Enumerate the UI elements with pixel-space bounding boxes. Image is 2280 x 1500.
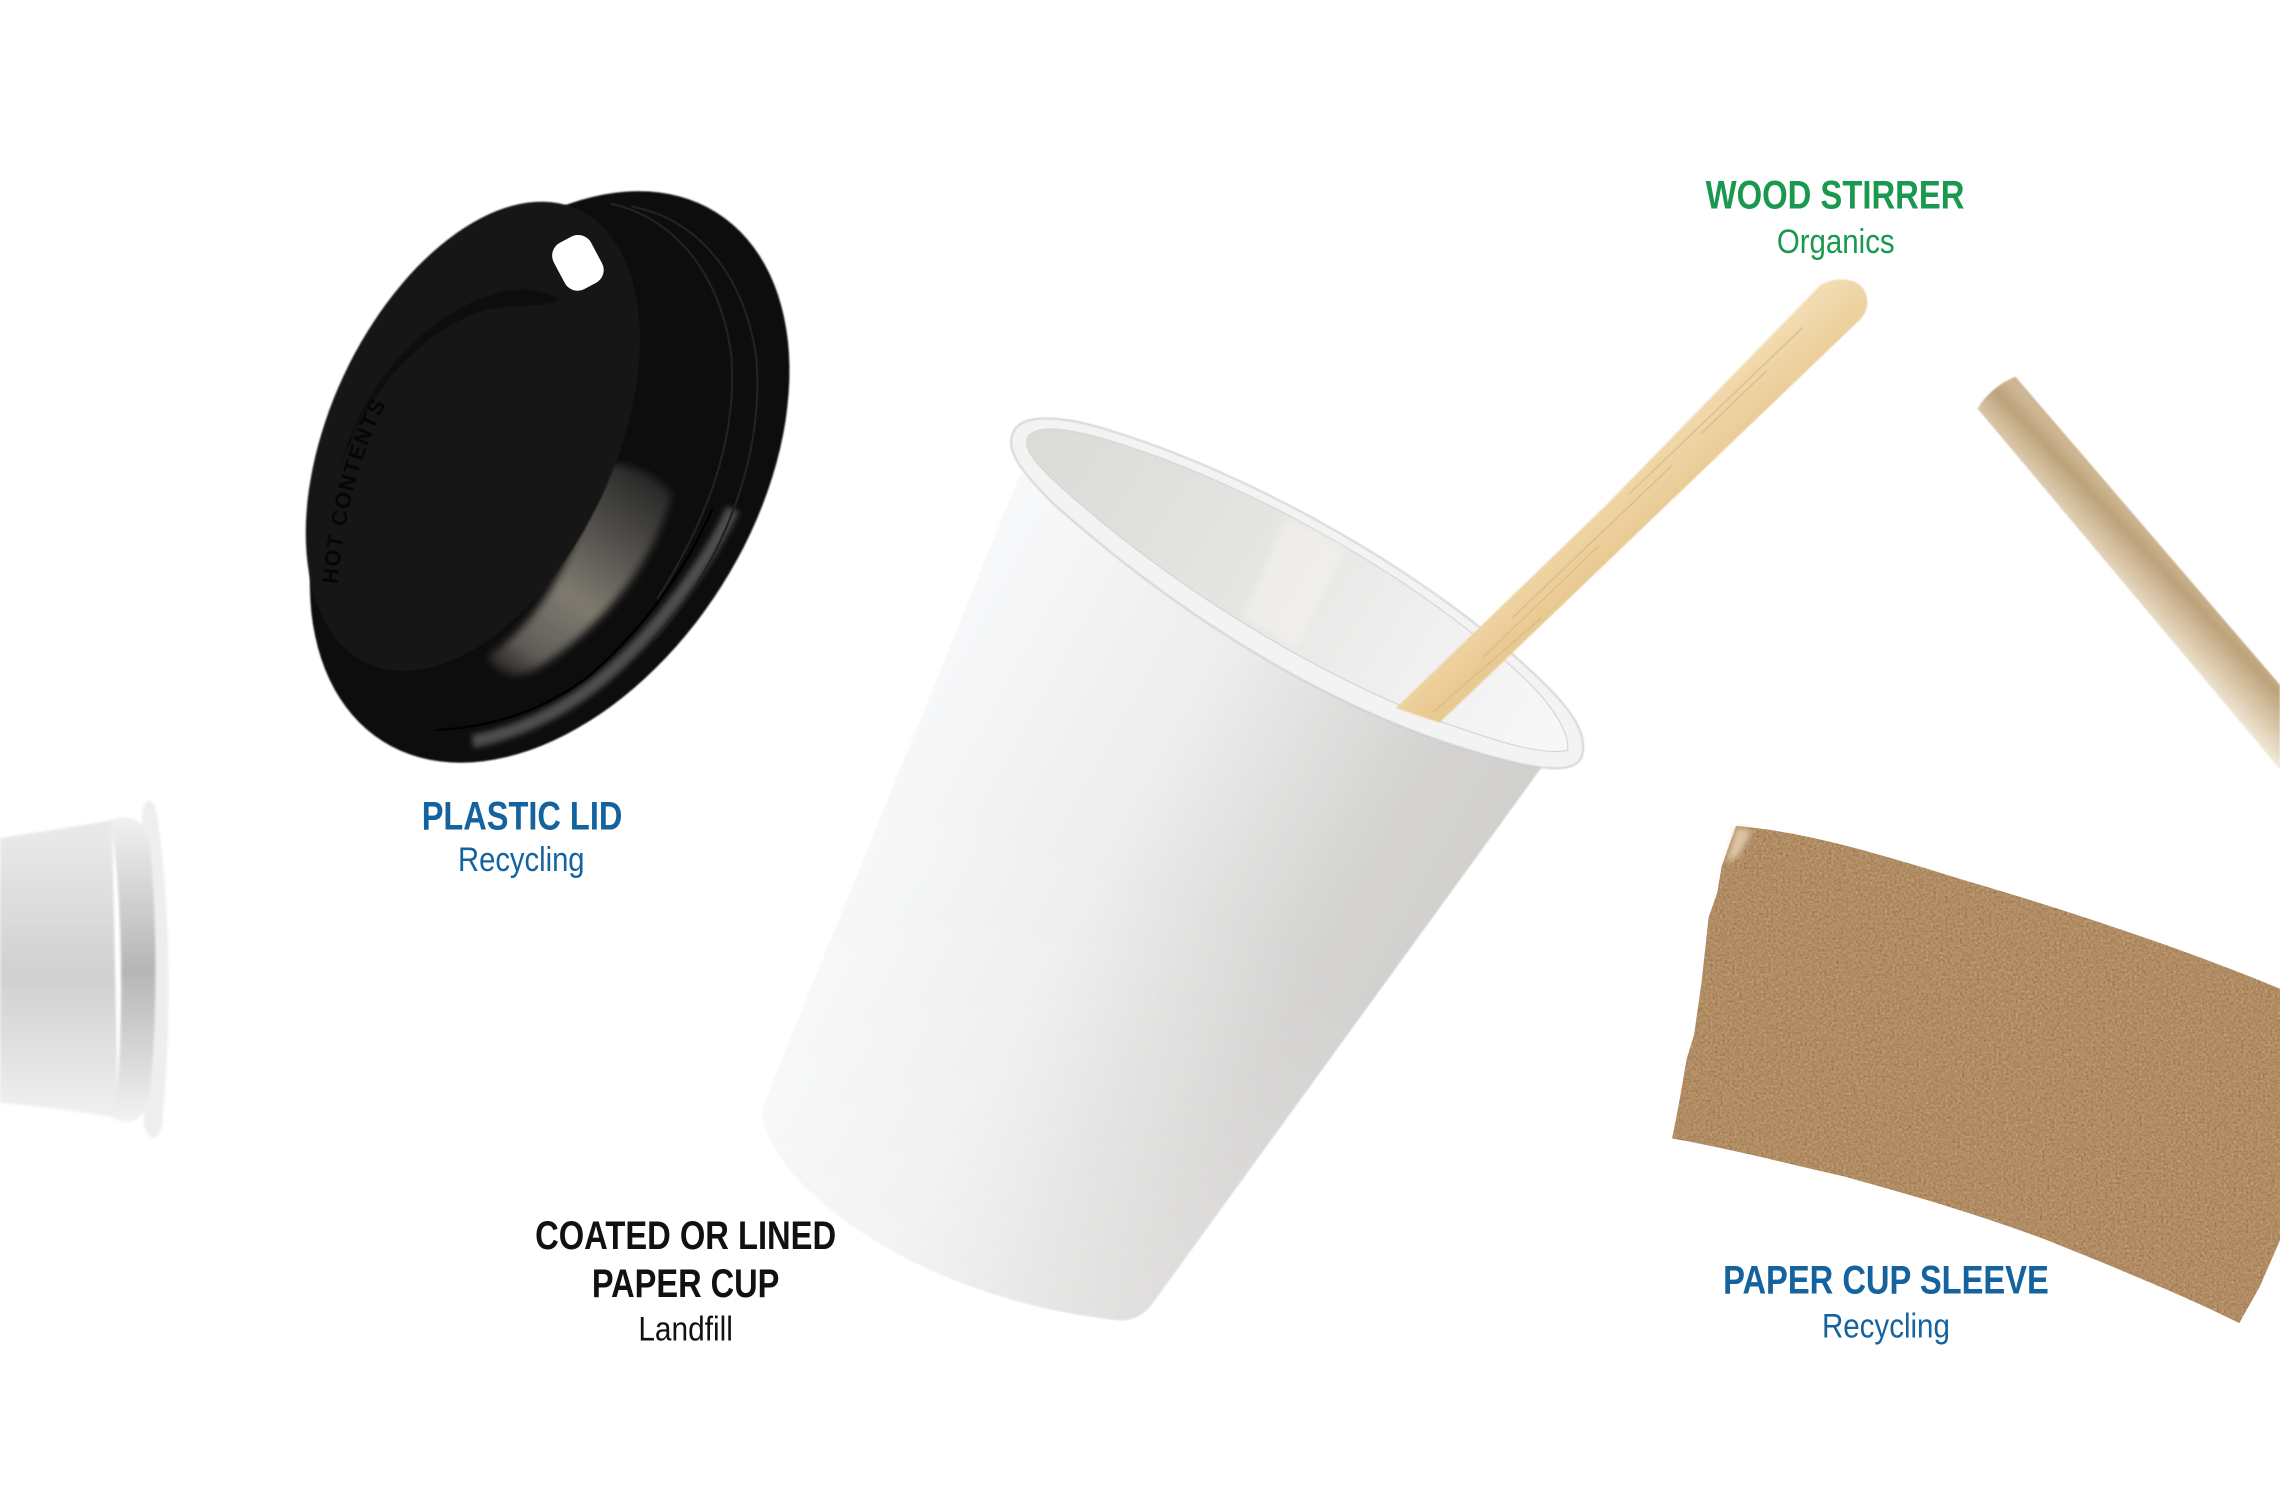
label: wood stirrer: WOOD STIRRER <box>1706 174 1965 218</box>
label: coated or lined paper cup: Landfill <box>638 1311 733 1349</box>
lid recess arc <box>342 290 560 465</box>
label: coated or lined paper cup: COATED OR LINED <box>535 1214 836 1258</box>
label: wood stirrer: Organics <box>1777 223 1895 261</box>
label: paper cup sleeve <box>1723 1258 2049 1346</box>
label: plastic lid: PLASTIC LID <box>422 795 622 839</box>
icon: paper straw <box>1978 377 2280 769</box>
label: paper cup sleeve: Recycling <box>1822 1308 1950 1346</box>
lid wall highlight <box>487 462 672 675</box>
cup body <box>763 473 1541 1320</box>
lid outer rim <box>211 104 889 850</box>
lid embossed text: HOT CONTENTS <box>322 400 384 583</box>
icon: kraft paper cup sleeve <box>1672 826 2280 1323</box>
cup interior <box>1027 429 1568 752</box>
label: plastic lid <box>422 795 622 879</box>
icon: paper cup with stirrer <box>763 279 1867 1320</box>
cup rim <box>1011 418 1583 768</box>
label: paper cup sleeve: PAPER CUP SLEEVE <box>1723 1258 2049 1302</box>
lid sip hole <box>547 230 609 296</box>
icon: small white cup at left edge <box>0 800 169 1138</box>
lid ring lines <box>436 204 757 730</box>
cup base fade <box>763 473 1541 1320</box>
stirrer grain <box>1432 327 1803 712</box>
wood stirrer <box>1396 279 1867 723</box>
lid ridge highlight <box>473 509 733 742</box>
label: coated or lined paper cup <box>535 1214 836 1349</box>
label: wood stirrer <box>1706 174 1965 261</box>
sleeve pale corner <box>1726 827 1752 864</box>
cup seam <box>1243 519 1345 649</box>
label: coated or lined paper cup: PAPER CUP <box>592 1262 779 1306</box>
label: plastic lid: Recycling <box>458 841 585 879</box>
lid top disc <box>238 149 707 723</box>
icon: black plastic lid <box>304 190 791 764</box>
